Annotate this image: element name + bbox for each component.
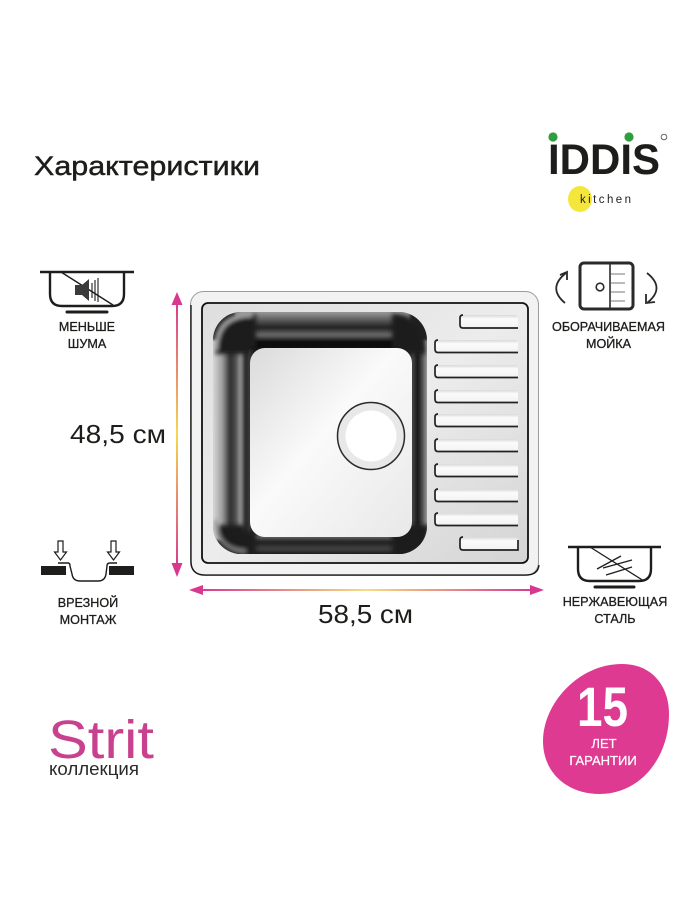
label: flush mount: МОНТАЖ <box>60 613 117 627</box>
label: stainless steel <box>563 595 667 626</box>
logo: IDDIS kitchen: kitchen <box>580 194 631 206</box>
label: flush mount: ВРЕЗНОЙ <box>58 595 118 610</box>
label: less noise: МЕНЬШЕ <box>59 320 115 334</box>
sink deck <box>202 303 528 563</box>
sink illustration <box>190 292 539 576</box>
label: stainless steel: НЕРЖАВЕЮЩАЯ <box>563 595 667 609</box>
label: stainless steel: СТАЛЬ <box>594 612 636 626</box>
label: reversible sink <box>552 320 665 351</box>
logo: IDDIS kitchen: IDDIS <box>548 136 660 184</box>
arrow: width dimension <box>189 585 544 595</box>
icon: stainless steel <box>568 547 661 587</box>
sink rim <box>190 292 538 576</box>
drain <box>338 402 404 470</box>
label: flush mount <box>58 595 118 627</box>
height label: 48,5 см <box>70 419 166 449</box>
basin <box>208 308 431 557</box>
infographic canvas <box>34 132 669 794</box>
warranty badge: 15 <box>577 675 628 738</box>
icon: less noise <box>40 272 134 312</box>
icon: reversible sink <box>556 263 656 309</box>
warranty badge <box>543 664 669 794</box>
label: less noise <box>59 320 115 351</box>
title: Характеристики <box>34 151 260 181</box>
warranty badge: ГАРАНТИИ <box>569 753 637 768</box>
icon: flush mount <box>41 541 134 581</box>
collection name: коллекция <box>49 759 139 779</box>
warranty badge: ЛЕТ <box>591 736 617 751</box>
label: reversible sink: ОБОРАЧИВАЕМАЯ <box>552 320 665 334</box>
label: reversible sink: МОЙКА <box>586 336 632 351</box>
arrow: height dimension <box>172 292 182 577</box>
logo: IDDIS kitchen <box>548 132 667 212</box>
label: less noise: ШУМА <box>68 337 107 351</box>
width label: 58,5 см <box>318 599 413 629</box>
drainer grooves <box>435 315 518 550</box>
collection name: Strit <box>48 710 154 770</box>
